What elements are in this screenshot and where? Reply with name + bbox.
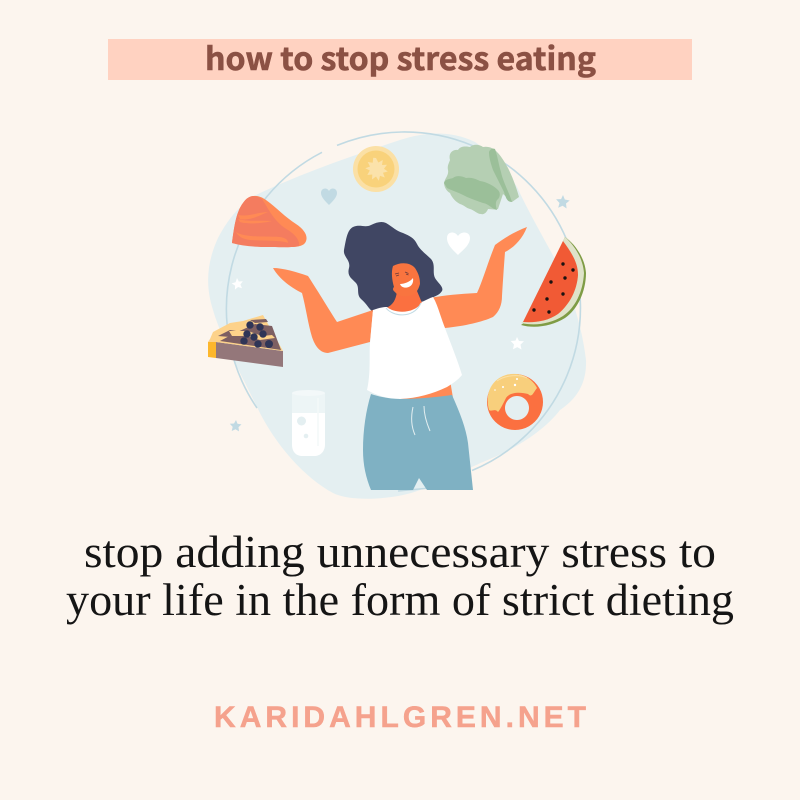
icon: donut bbox=[487, 374, 543, 430]
smile and eyes bbox=[395, 272, 413, 288]
title banner: how to stop stress eating bbox=[205, 34, 596, 79]
main message text: your life in the form of strict dieting bbox=[66, 575, 734, 625]
woman figure bbox=[273, 222, 527, 490]
neck bbox=[386, 291, 422, 319]
ring outline bbox=[226, 132, 580, 491]
main message text bbox=[66, 527, 734, 625]
icon: watermelon slice bbox=[521, 237, 586, 327]
illustration: woman juggling foods bbox=[208, 132, 586, 499]
icon: salmon fillet bbox=[232, 196, 307, 247]
icon: blue heart bbox=[321, 189, 337, 205]
white top bbox=[367, 297, 462, 399]
right arm bbox=[430, 227, 527, 328]
neckline bbox=[386, 303, 421, 315]
midriff bbox=[395, 380, 453, 402]
drawstrings bbox=[412, 406, 430, 435]
left arm bbox=[273, 268, 373, 353]
blue trousers bbox=[363, 394, 473, 490]
icons: small stars bbox=[230, 195, 570, 431]
icon: lettuce bbox=[444, 145, 519, 214]
website footer: KARIDAHLGREN.NET bbox=[214, 701, 586, 734]
hair bbox=[344, 222, 442, 312]
icon: white heart bbox=[447, 232, 470, 255]
title banner bbox=[108, 34, 692, 80]
icon: glass of water bbox=[292, 390, 325, 456]
face bbox=[392, 263, 420, 296]
icon: blueberry pie slice bbox=[208, 315, 283, 367]
main message text: stop adding unnecessary stress to bbox=[84, 527, 716, 577]
icon: orange slice bbox=[353, 146, 399, 192]
background blob bbox=[208, 134, 586, 499]
